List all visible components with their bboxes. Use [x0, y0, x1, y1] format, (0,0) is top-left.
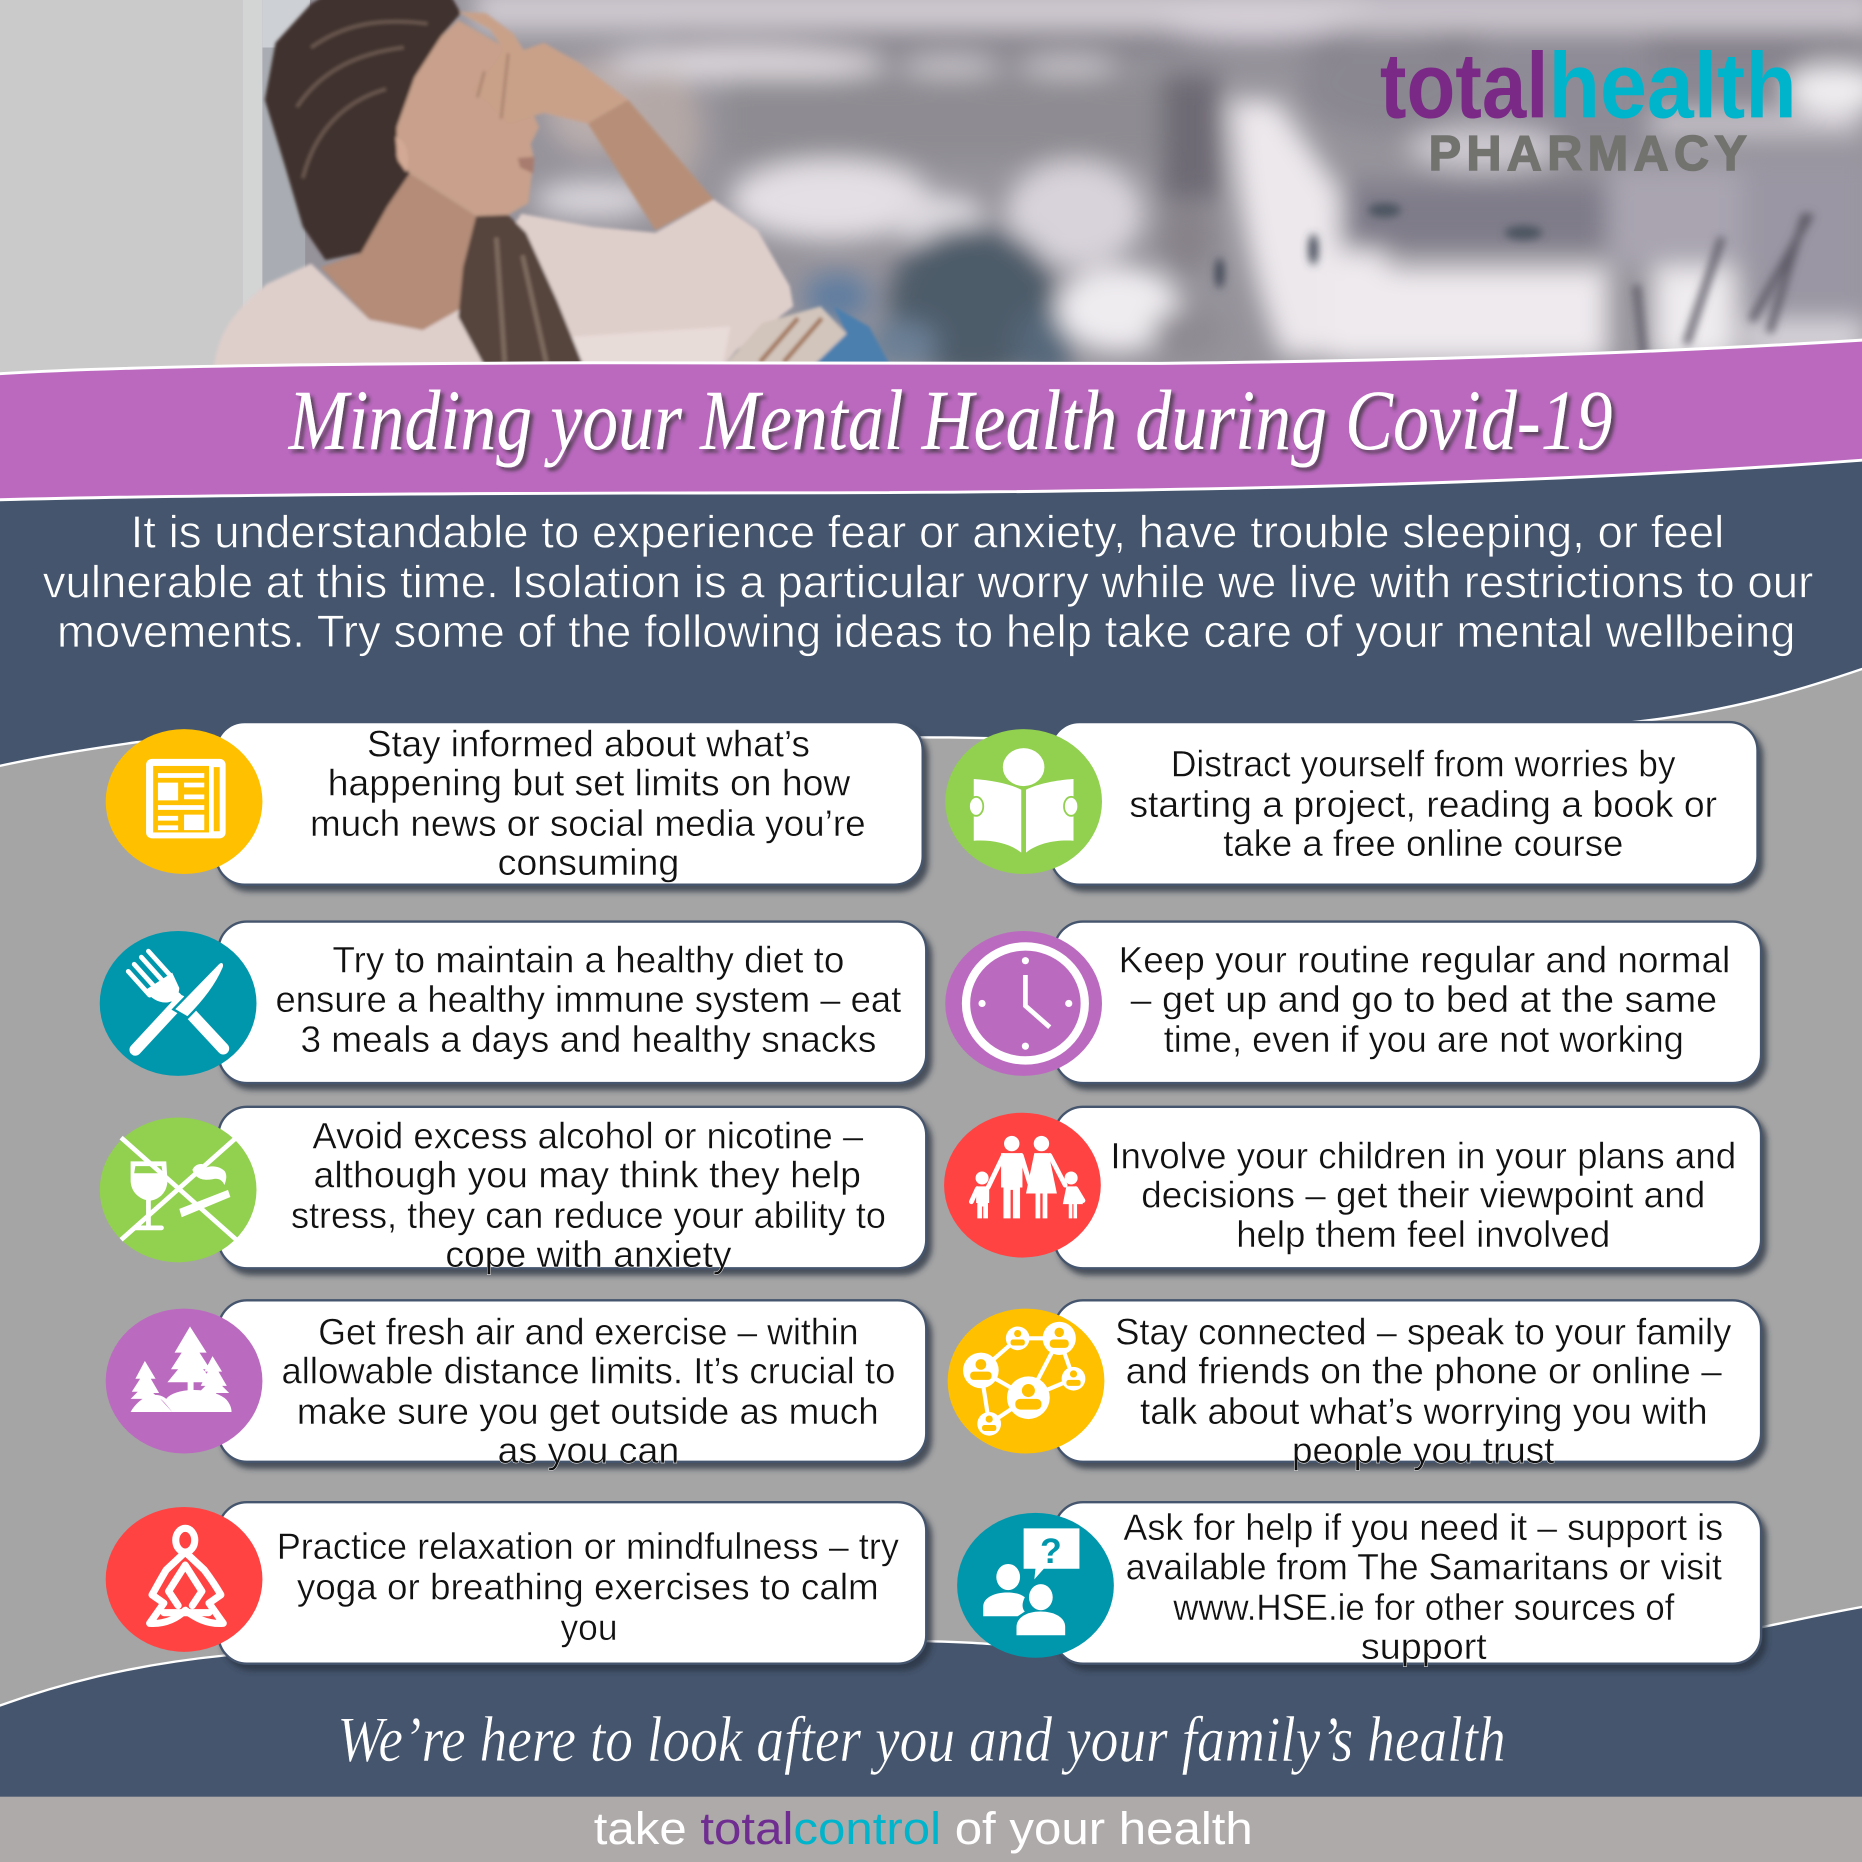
tip: fresh air and exercise: make sure you get outside as much — [297, 1391, 879, 1432]
purple title band — [0, 340, 1862, 500]
footer strapline: We’re here to look after you and your family’s health — [337, 1704, 1506, 1775]
tip: healthy diet: ensure a healthy immune system – eat — [276, 979, 901, 1020]
tip: keep routine: time, even if you are not working — [1164, 1019, 1684, 1060]
tip: healthy diet: 3 meals a days and healthy snacks — [300, 1019, 876, 1060]
tip: fresh air and exercise: allowable distance limits. It’s crucial to — [281, 1350, 895, 1391]
icon: newspaper — [106, 729, 262, 874]
tip: keep routine — [1054, 922, 1761, 1083]
tip: stay informed: Stay informed about what’s — [367, 723, 810, 764]
tip: distract yourself — [1051, 722, 1758, 885]
icon: family — [944, 1113, 1101, 1258]
tip: stay informed — [216, 722, 923, 885]
navy background band — [0, 457, 1862, 1862]
tip: relaxation: Practice relaxation or mindfulness – try — [277, 1526, 900, 1567]
tip: alcohol or nicotine: cope with anxiety — [445, 1234, 732, 1275]
icon: person reading a book — [945, 729, 1102, 874]
tip: stay informed: consuming — [498, 842, 679, 883]
tip: stay connected: and friends on the phone or online – — [1126, 1350, 1722, 1391]
tip: stay informed: much news or social media you’re — [310, 803, 866, 844]
tip: ask for help: support — [1361, 1626, 1487, 1667]
tip: involve children — [1054, 1107, 1761, 1268]
tip: relaxation: you — [560, 1607, 618, 1648]
hero photo: woman at a snowy window — [0, 0, 1862, 380]
intro text: vulnerable at this time. Isolation is a particular worry while we live with restrictions to our — [43, 556, 1813, 607]
tip: ask for help: available from The Samaritans or visit — [1126, 1546, 1722, 1587]
tip: stay informed: happening but set limits on how — [328, 763, 851, 804]
icon: people asking a question: ? — [1040, 1531, 1062, 1571]
tip: ask for help: Ask for help if you need it – support is — [1123, 1507, 1723, 1548]
intro text: It is understandable to experience fear or anxiety, have trouble sleeping, or feel — [131, 506, 1724, 557]
tip: fresh air and exercise: as you can — [498, 1430, 679, 1471]
tip: healthy diet: Try to maintain a healthy diet to — [332, 940, 844, 981]
intro text: movements. Try some of the following ideas to help take care of your mental wellbeing — [57, 606, 1796, 657]
tip: involve children: help them feel involved — [1236, 1214, 1610, 1255]
title: Minding your Mental Health during Covid-19 — [288, 374, 1613, 468]
icon: no alcohol or smoking — [100, 1117, 256, 1262]
tip: relaxation: yoga or breathing exercises to calm — [297, 1567, 879, 1608]
tip: stay connected: Stay connected – speak to your family — [1115, 1311, 1732, 1352]
logo: totalhealth pharmacy: health — [1548, 34, 1797, 138]
tip: healthy diet — [218, 922, 926, 1083]
logo: totalhealth pharmacy: total — [1380, 34, 1548, 138]
icon: trees on hills — [106, 1309, 262, 1454]
tip: fresh air and exercise: Get fresh air and exercise – within — [318, 1311, 859, 1352]
icon: social network — [948, 1309, 1104, 1454]
grey central panel — [0, 666, 1862, 1708]
tip: alcohol or nicotine — [218, 1107, 926, 1275]
tip: keep routine: – get up and go to bed at the same — [1130, 979, 1717, 1020]
tip: distract yourself: take a free online course — [1223, 823, 1623, 864]
footer bar — [0, 1797, 1862, 1862]
footer bar: take totalcontrol of your health — [594, 1803, 1253, 1854]
woman figure — [214, 0, 892, 368]
icon: clock — [945, 931, 1102, 1076]
tip: relaxation — [218, 1502, 926, 1664]
logo: totalhealth pharmacy: PHARMACY — [1429, 127, 1747, 181]
icon: meditation figure — [106, 1507, 262, 1652]
tip: distract yourself: Distract yourself from worries by — [1171, 744, 1676, 785]
logo: totalhealth pharmacy — [1380, 34, 1797, 181]
tip: alcohol or nicotine: Avoid excess alcohol or nicotine – — [312, 1115, 864, 1156]
icon: knife and fork — [100, 931, 256, 1076]
tip: keep routine: Keep your routine regular and normal — [1119, 940, 1730, 981]
intro text — [43, 506, 1813, 657]
tip: stay connected — [1054, 1300, 1761, 1471]
tip: alcohol or nicotine: stress, they can reduce your ability to — [291, 1195, 886, 1236]
tip: fresh air and exercise — [218, 1300, 926, 1471]
tip: ask for help: www.HSE.ie for other sources of — [1172, 1587, 1675, 1628]
icon: people asking a question — [957, 1513, 1114, 1658]
tip: involve children: Involve your children in your plans and — [1110, 1135, 1736, 1176]
tip: ask for help — [1054, 1502, 1761, 1667]
tip: stay connected: talk about what’s worrying you with — [1140, 1391, 1708, 1432]
tip: alcohol or nicotine: although you may think they help — [314, 1154, 861, 1195]
tip: stay connected: people you trust — [1292, 1430, 1554, 1471]
tip: distract yourself: starting a project, reading a book or — [1129, 784, 1717, 825]
tip: involve children: decisions – get their viewpoint and — [1141, 1175, 1705, 1216]
